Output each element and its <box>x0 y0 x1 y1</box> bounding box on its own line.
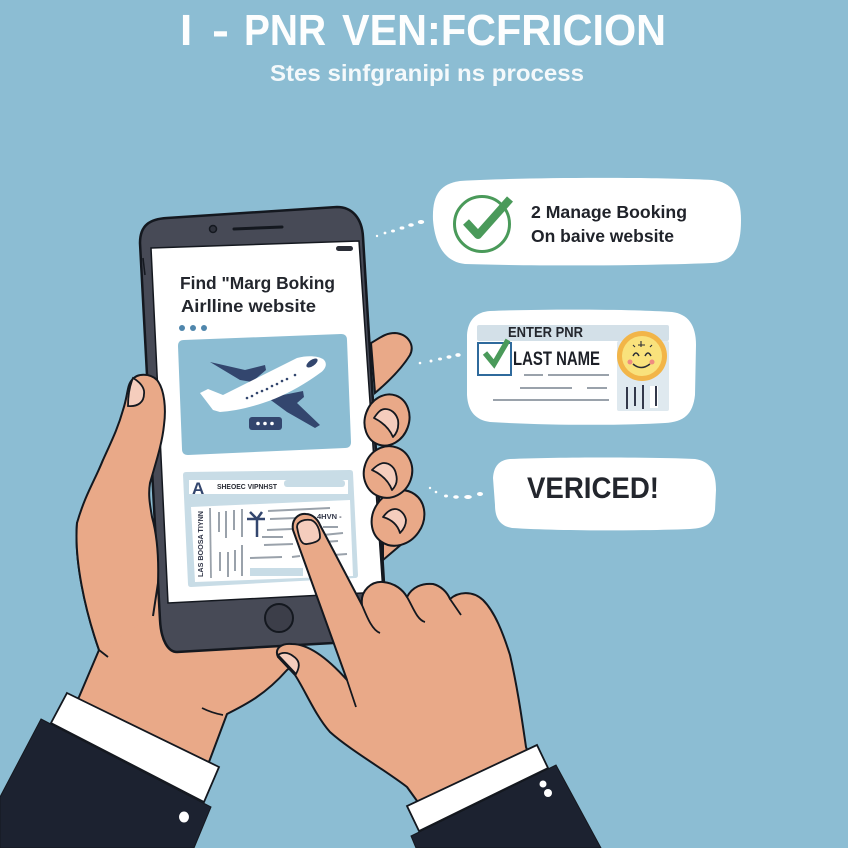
screen heading <box>180 273 335 316</box>
windows <box>246 374 296 399</box>
speaker <box>234 227 282 229</box>
card lines <box>493 375 609 400</box>
chat pill <box>249 417 282 430</box>
connector three <box>429 487 483 499</box>
left hand palm <box>60 460 300 762</box>
pass name: SHEOEC VIPNHST <box>217 482 277 491</box>
far wing <box>210 362 266 382</box>
barcode and data lines <box>210 508 347 578</box>
smiley badge <box>617 331 667 381</box>
pointing right hand <box>277 514 535 812</box>
screen heading: Find "Marg Boking <box>180 273 335 293</box>
left thumb <box>77 375 165 657</box>
phone <box>140 207 385 652</box>
right cuff <box>407 745 548 831</box>
index nail <box>297 520 320 544</box>
callout: enter pnr card <box>467 310 696 425</box>
finger three <box>357 439 419 505</box>
left cuff <box>51 693 219 802</box>
knuckle creases <box>347 597 461 707</box>
pass code: 4HVN - <box>317 512 342 521</box>
enter pnr label: ENTER PNR <box>508 325 583 341</box>
callout text: 2 Manage Booking <box>531 202 687 222</box>
pass header <box>189 480 348 494</box>
title: - <box>212 6 229 55</box>
title: I <box>180 6 192 55</box>
connector two <box>419 353 461 364</box>
cockpit <box>305 357 319 369</box>
screen heading: Airlline website <box>181 296 316 316</box>
airline logo: A <box>192 479 204 498</box>
finger nails <box>372 409 406 533</box>
finger four <box>361 480 435 556</box>
callout: manage booking <box>433 178 741 265</box>
phone body <box>140 207 385 652</box>
screen <box>151 241 383 603</box>
boarding pass <box>183 470 358 587</box>
bubble <box>493 458 716 530</box>
left button <box>179 812 189 822</box>
header bar <box>477 325 669 341</box>
home button <box>265 604 293 632</box>
barcode <box>627 385 658 409</box>
check icon <box>454 196 510 252</box>
phone side button <box>143 258 145 275</box>
vertical text: LAS BOOSA TIYNN <box>198 511 205 577</box>
camera <box>210 226 216 232</box>
card <box>467 310 696 425</box>
palm crease <box>202 708 223 715</box>
pass frame <box>183 470 358 587</box>
callout text <box>531 202 687 246</box>
verified text: VERICED! <box>527 472 659 505</box>
hand shape <box>277 514 535 812</box>
plane card <box>178 334 351 455</box>
callout: verified <box>493 458 716 530</box>
pass body <box>191 500 353 582</box>
near wing <box>268 391 320 428</box>
bubble <box>433 178 741 265</box>
flight icon <box>247 512 265 537</box>
status indicator <box>336 246 353 251</box>
finger one <box>371 333 412 393</box>
lower pill <box>250 568 303 576</box>
callout text: On baive website <box>531 226 674 246</box>
subtitle: Stes sinfgranipi ns process <box>270 60 584 86</box>
wrist crease <box>99 650 108 657</box>
last name label: LAST NAME <box>513 348 600 370</box>
connector one <box>376 220 424 237</box>
finger four tail <box>383 540 403 560</box>
title: VEN:FCFRICION <box>342 6 666 55</box>
finger two <box>357 388 417 452</box>
header pill <box>284 480 345 487</box>
checkbox <box>478 340 511 375</box>
thumb nail <box>278 653 299 674</box>
fuselage <box>200 356 326 412</box>
holding fingers <box>357 333 435 560</box>
pagination dots <box>179 325 207 331</box>
thumb shape <box>77 375 165 650</box>
right buttons <box>540 780 552 797</box>
right sleeve <box>411 765 601 848</box>
thumbnail <box>128 378 144 406</box>
title: PNR <box>244 6 326 55</box>
side panel <box>617 341 669 411</box>
left sleeve <box>0 719 211 848</box>
airplane <box>200 356 326 428</box>
